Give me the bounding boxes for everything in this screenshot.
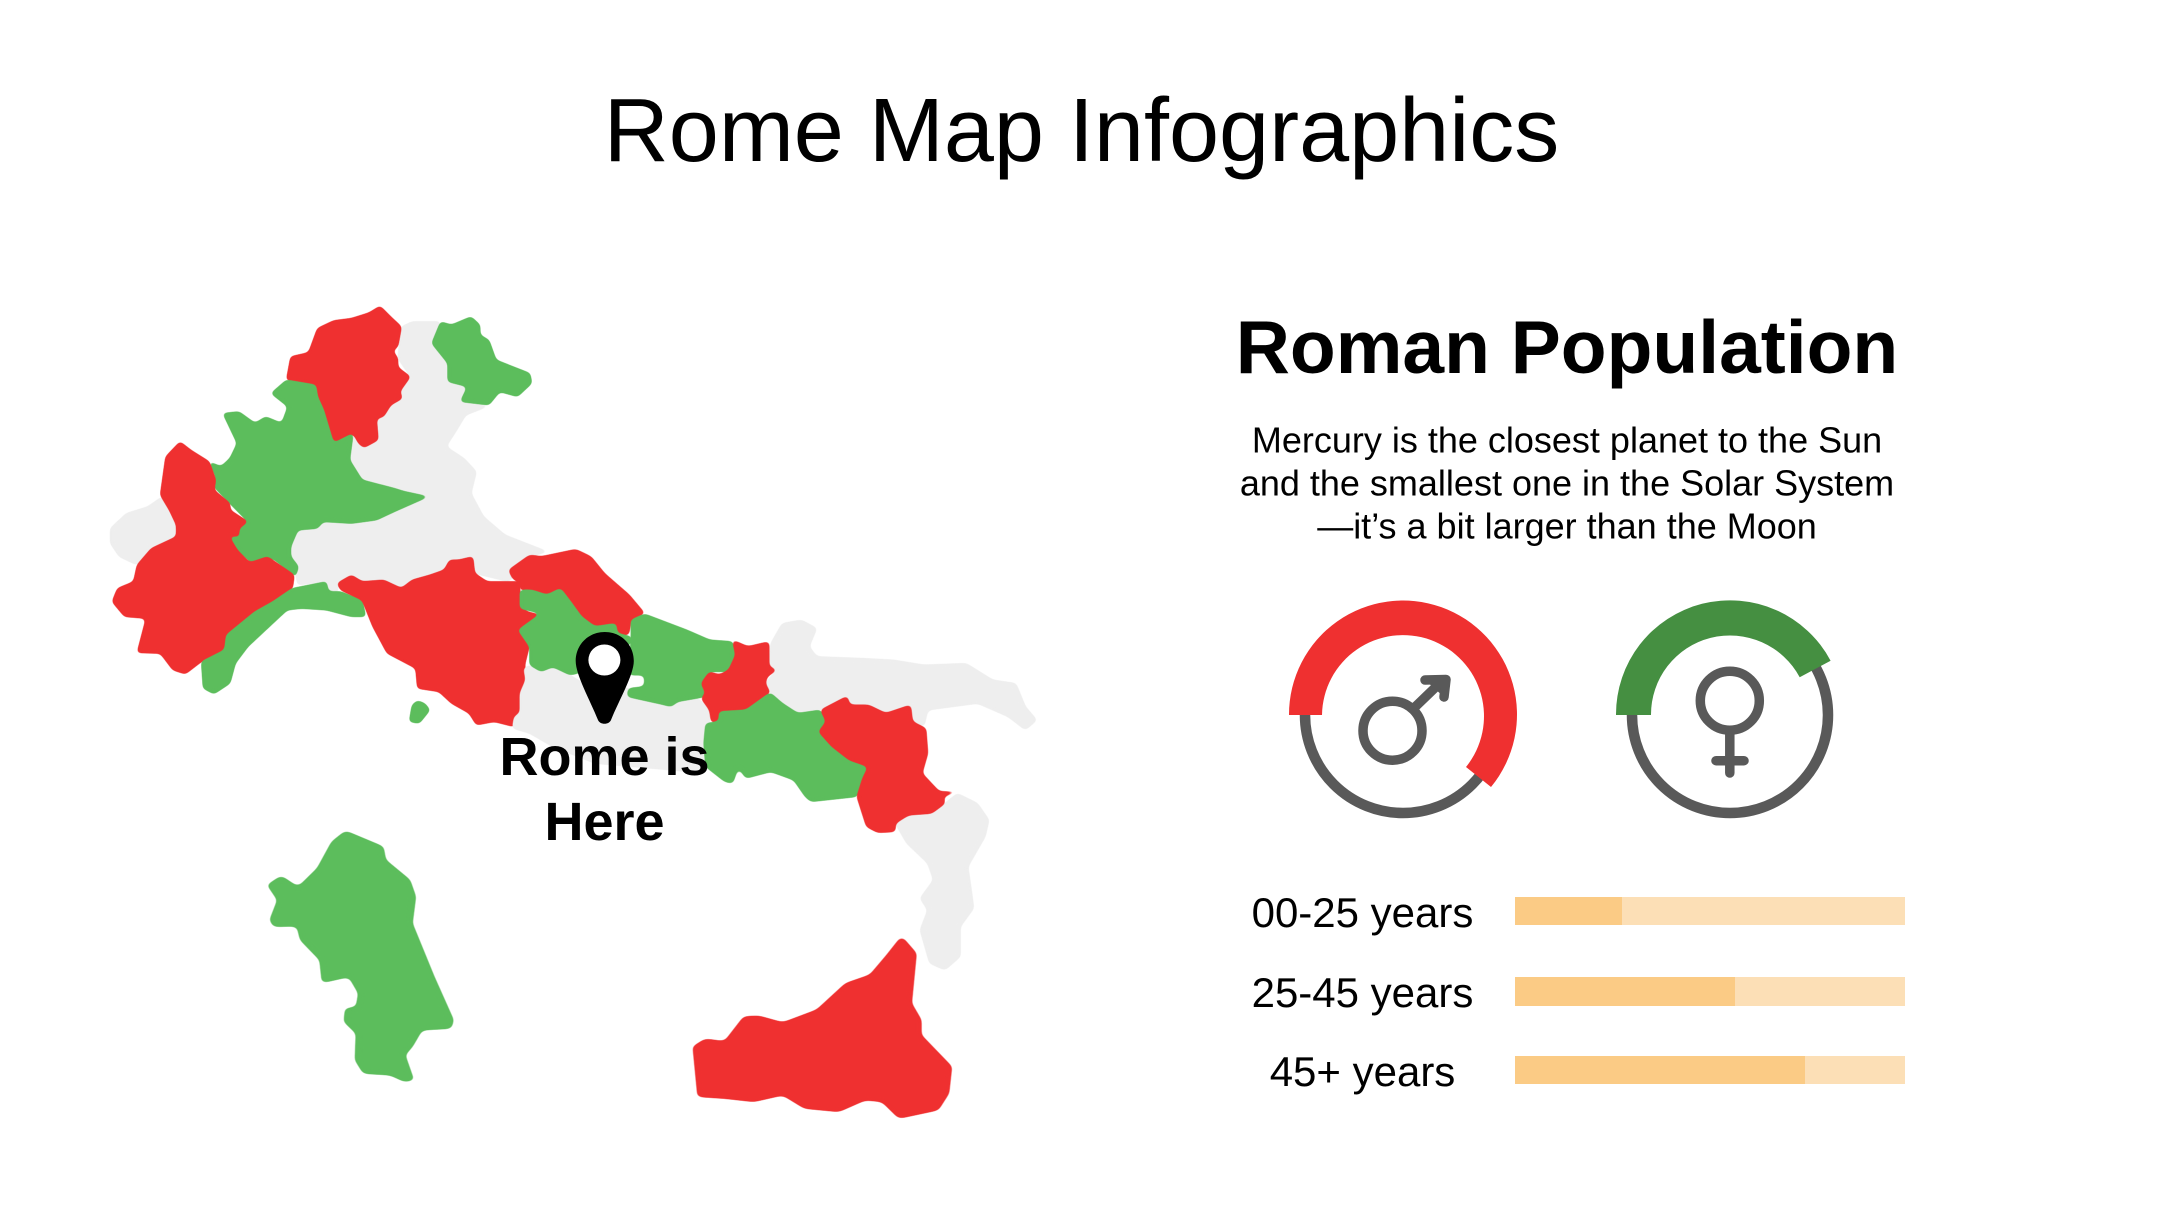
map label: Rome is Here: Here [544,792,665,852]
age row: 25-45 years [1252,969,1905,1016]
region: north-east green [432,317,532,405]
description text [1240,420,1894,546]
age row: 00-25 years [1252,889,1905,936]
male gauge [1289,601,1517,813]
female gauge [1616,600,1831,813]
age row: 25-45 years: 25-45 years [1252,969,1473,1016]
region: Campania green [704,693,868,802]
description text: and the smallest one in the Solar System [1240,462,1894,504]
icon: map pin [576,632,634,724]
age row: 45+ years: 45+ years [1270,1048,1455,1095]
northern map regions [110,306,548,727]
region: Puglia grey [765,620,1037,730]
heading: Roman Population: Roman Population [1236,305,1898,389]
region: coastal green [201,582,366,694]
region: Sicily red [693,937,952,1118]
region: Calabria grey [895,793,989,970]
southern map regions [509,549,1037,970]
region: Molise red [701,640,777,723]
icon: male symbol [1363,680,1446,760]
region: central north green [209,380,428,577]
age row: 45+ years [1270,1048,1905,1095]
region: central red [337,557,541,727]
region: Umbria green [518,588,631,675]
region: Abruzzo green [627,614,736,707]
age row: 00-25 years: 00-25 years [1252,889,1473,936]
title: Rome Map Infographics [604,81,1559,181]
region: north-east grey [289,322,548,592]
region: Lazio grey [513,665,710,773]
map of Italy regions [110,306,1037,1118]
islands [268,831,952,1118]
region: north red [286,306,410,448]
region: Sardinia green [268,831,453,1082]
description text: Mercury is the closest planet to the Sun [1252,420,1882,460]
region: small island [409,701,430,723]
region: west red [112,442,294,674]
region: Marche red [509,549,645,635]
description text: —it’s a bit larger than the Moon [1317,506,1817,546]
region: north-west grey [110,497,176,565]
map label: Rome is Here [499,727,710,852]
map label: Rome is Here: Rome is [499,727,710,787]
region: Basilicata red [819,696,957,833]
icon: female symbol [1700,671,1759,773]
